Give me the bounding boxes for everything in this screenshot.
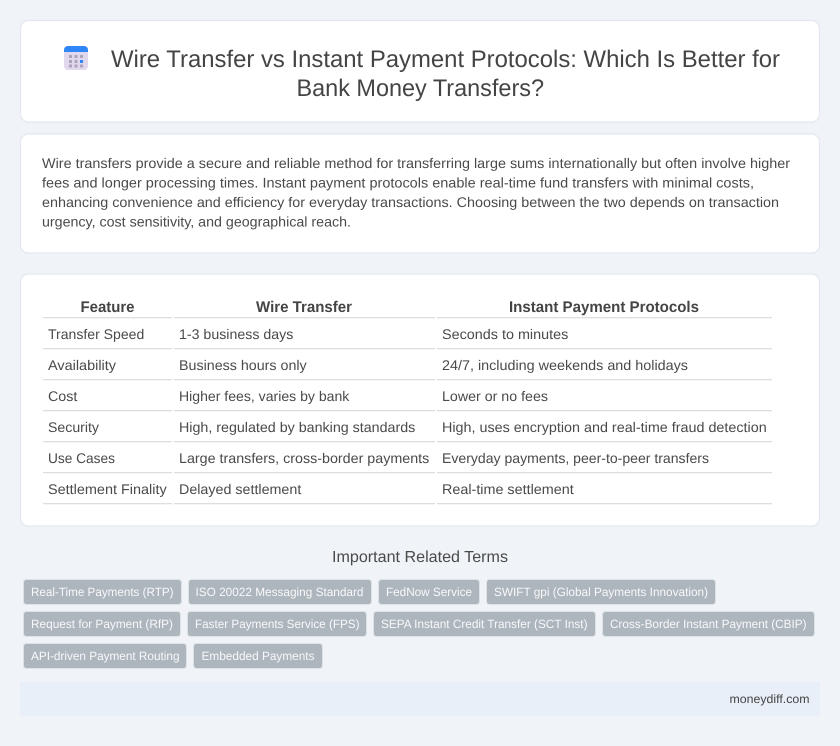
tag: RTP: Real-Time Payments (RTP) bbox=[31, 585, 174, 599]
tag: embedded payments: Embedded Payments bbox=[202, 649, 314, 663]
tag: SWIFT gpi bbox=[486, 580, 716, 604]
tag: SWIFT gpi: SWIFT gpi (Global Payments Innovation) bbox=[494, 585, 708, 599]
row: security: High, regulated by banking standards bbox=[179, 419, 415, 435]
row: settlement finality: Real-time settlement bbox=[442, 481, 574, 497]
tag: ISO 20022 bbox=[188, 580, 372, 604]
tag: API routing bbox=[24, 644, 186, 668]
row: security: High, uses encryption and real-time fraud detection bbox=[442, 419, 767, 435]
table header: Instant Payment Protocols bbox=[509, 299, 699, 316]
row: cost: Lower or no fees bbox=[442, 388, 548, 404]
row: availability: Business hours only bbox=[179, 357, 307, 373]
row: availability: 24/7, including weekends and holidays bbox=[442, 357, 688, 373]
intro text: urgency, cost sensitivity, and geographical reach. bbox=[42, 214, 351, 230]
footer bbox=[20, 682, 820, 716]
row: availability: Availability bbox=[48, 357, 116, 373]
tag: CBIP: Cross-Border Instant Payment (CBIP) bbox=[610, 617, 806, 631]
table header: Wire Transfer bbox=[256, 299, 352, 316]
row: cost bbox=[48, 388, 548, 404]
tag: FPS bbox=[188, 612, 366, 636]
tag: RTP bbox=[24, 580, 182, 604]
intro text bbox=[42, 155, 790, 230]
panel: header bbox=[20, 20, 820, 122]
row: cost: Higher fees, varies by bank bbox=[179, 388, 350, 404]
footer site name: moneydiff.com bbox=[730, 692, 810, 706]
heading: related terms: Important Related Terms bbox=[332, 549, 508, 566]
row: settlement finality bbox=[48, 481, 574, 497]
row: security: Security bbox=[48, 419, 99, 435]
row: settlement finality: Settlement Finality bbox=[48, 481, 167, 497]
table header bbox=[80, 299, 699, 316]
tag: embedded payments bbox=[194, 644, 322, 668]
title bbox=[111, 46, 780, 102]
row: transfer speed: 1-3 business days bbox=[179, 326, 293, 342]
intro text: fees and longer processing times. Instant payment protocols enable real-time fund transfers with minimal costs, bbox=[42, 174, 754, 190]
tag: FPS: Faster Payments Service (FPS) bbox=[195, 617, 360, 631]
row: use cases bbox=[48, 450, 709, 466]
tag: ISO 20022: ISO 20022 Messaging Standard bbox=[196, 585, 364, 599]
tag: SCT Inst: SEPA Instant Credit Transfer (SCT Inst) bbox=[381, 617, 588, 631]
row: settlement finality: Delayed settlement bbox=[179, 481, 301, 497]
table header: Feature bbox=[80, 299, 135, 316]
intro text: Wire transfers provide a secure and reliable method for transferring large sums internationally but often involve higher bbox=[42, 155, 790, 171]
tag: CBIP bbox=[602, 612, 814, 636]
tag: FedNow: FedNow Service bbox=[386, 585, 472, 599]
tag: RfP bbox=[24, 612, 180, 636]
related term tags bbox=[24, 580, 814, 668]
intro text: enhancing convenience and efficiency for everyday transactions. Choosing between the two depends on transaction bbox=[42, 194, 779, 210]
row: transfer speed: Seconds to minutes bbox=[442, 326, 568, 342]
tag: API routing: API-driven Payment Routing bbox=[31, 649, 180, 663]
title: Bank Money Transfers? bbox=[296, 75, 544, 102]
row: security bbox=[48, 419, 767, 435]
row: use cases: Everyday payments, peer-to-peer transfers bbox=[442, 450, 709, 466]
tag: SCT Inst bbox=[374, 612, 596, 636]
icon: calendar bbox=[64, 46, 88, 70]
row: cost: Cost bbox=[48, 388, 77, 404]
panel: comparison table bbox=[20, 274, 820, 526]
row: transfer speed: Transfer Speed bbox=[48, 326, 144, 342]
tag: RfP: Request for Payment (RfP) bbox=[31, 617, 173, 631]
title: Wire Transfer vs Instant Payment Protocols: Which Is Better for bbox=[111, 46, 780, 73]
row: use cases: Large transfers, cross-border payments bbox=[179, 450, 429, 466]
row: transfer speed bbox=[48, 326, 568, 342]
tag: FedNow bbox=[378, 580, 480, 604]
panel: introduction bbox=[20, 134, 820, 253]
row: use cases: Use Cases bbox=[48, 450, 115, 466]
row: availability bbox=[48, 357, 688, 373]
